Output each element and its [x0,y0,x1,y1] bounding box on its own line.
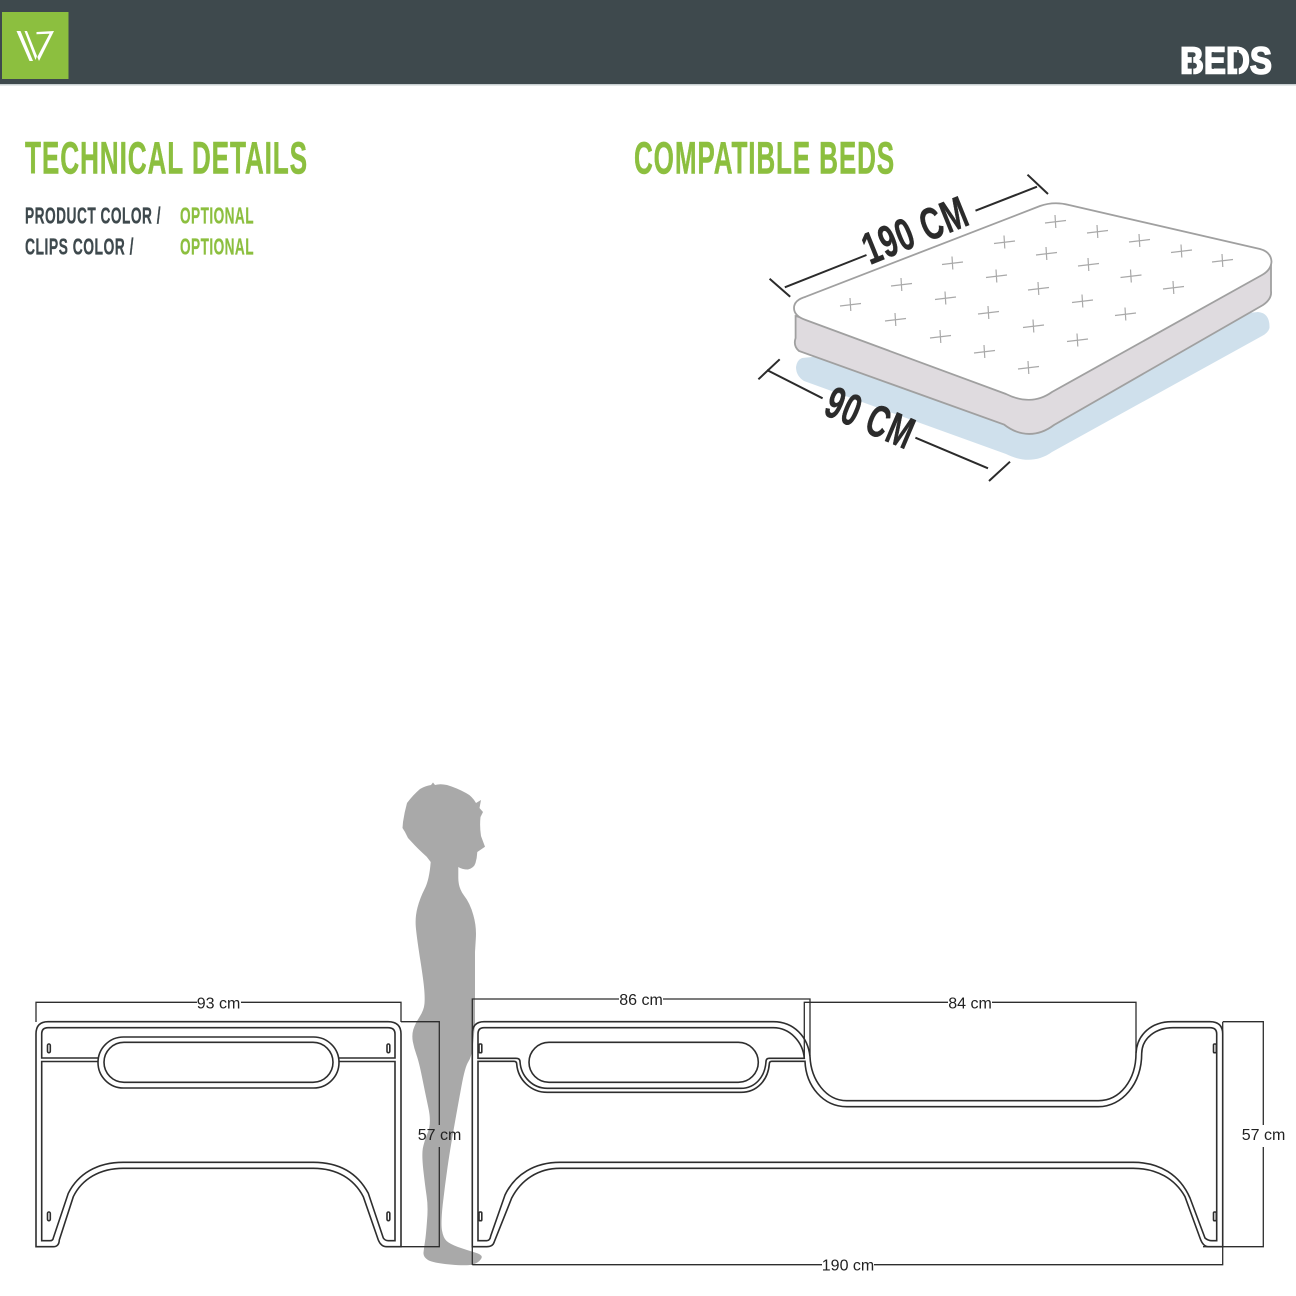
main panel contour [478,1028,1217,1241]
mattress illustration [794,203,1272,460]
tufting marks [840,215,1233,374]
mattress top [794,203,1272,400]
outer contour [472,1022,1223,1247]
header category label: BEDS [1180,40,1272,82]
dimension: side panel 84 cm [804,995,1136,1058]
icon: brand logo [2,12,68,79]
outer contour [36,1022,401,1247]
dimension: end panel height 57 cm: 57 cm [418,1127,461,1144]
dimension: side panel 84 cm: 84 cm [948,995,992,1012]
dimension: side panel 86 cm [472,992,810,1265]
dimension: mattress width 90 cm: 90 CM [818,376,923,459]
header bar [0,0,1296,86]
dimension: total length 190 cm: 190 cm [822,1258,874,1274]
heading: compatible beds: COMPATIBLE BEDS [634,132,895,184]
handle cut-out [529,1042,758,1082]
lower panel contour [42,1062,395,1241]
bed end panel [36,1022,401,1247]
heading: technical details: TECHNICAL DETAILS [25,132,308,184]
dimension: total length 190 cm [472,1022,1223,1274]
bed side panel [472,1022,1223,1247]
mattress side [795,262,1271,434]
mattress shadow [796,312,1270,460]
dimension: end panel height 57 cm [401,1022,461,1247]
text block: colour specifications: OPTIONAL [180,202,254,228]
text block: colour specifications [25,202,254,259]
dimension: end panel width 93 cm: 93 cm [197,995,240,1012]
upper band and handle surround [478,1028,804,1088]
handle cut-out [98,1037,339,1088]
text block: colour specifications: OPTIONAL [180,233,254,259]
upper band [42,1028,395,1058]
fixing slots [479,1044,482,1053]
dimension: side panel 86 cm: 86 cm [619,992,663,1009]
dimension: side panel height 57 cm [1203,1022,1285,1247]
dimension: mattress length 190 cm: 190 CM [855,186,976,274]
dimension: mattress length 190 cm [770,175,1048,297]
dimension: end panel width 93 cm [36,995,401,1022]
text block: colour specifications: CLIPS COLOR / [25,233,134,259]
dimension: side panel height 57 cm: 57 cm [1242,1127,1285,1144]
fixing slots [48,1044,50,1053]
dimension: mattress width 90 cm [758,359,1010,481]
human silhouette [402,782,485,1265]
text block: colour specifications: PRODUCT COLOR / [25,202,161,228]
